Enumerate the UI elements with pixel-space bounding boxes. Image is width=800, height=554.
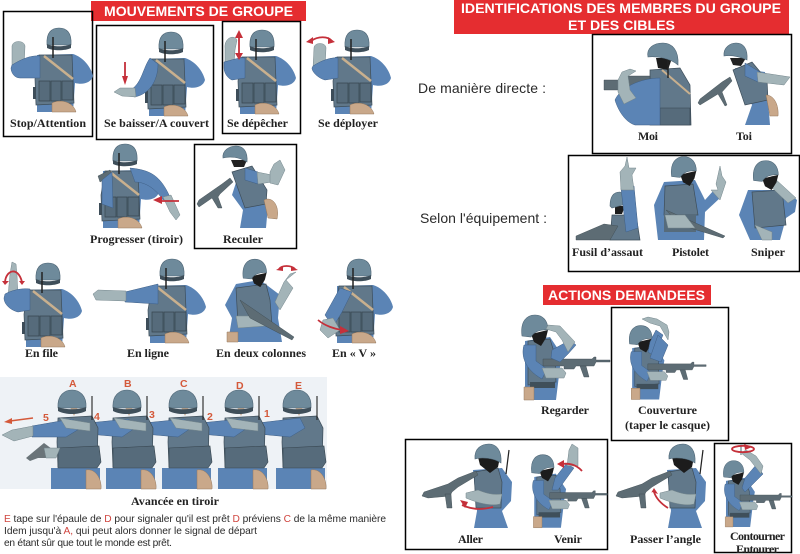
caption: Avancée en tiroir: Avancée en tiroir bbox=[131, 494, 220, 508]
soldier E bbox=[258, 390, 326, 489]
figure: Progresser (tiroir): Progresser (tiroir) bbox=[90, 232, 183, 246]
figure: Pistolet bbox=[654, 157, 726, 259]
figure: Toi bbox=[698, 43, 790, 143]
figure: Pistolet: Pistolet bbox=[672, 245, 709, 259]
letters: E bbox=[295, 380, 302, 392]
figure: Regarder bbox=[522, 315, 610, 417]
figure: Aller bbox=[422, 444, 548, 546]
figure: Se déployer bbox=[306, 30, 391, 130]
figure: Sniper bbox=[739, 161, 797, 259]
panel: Se baisser/A couvert: Se baisser/A couvert bbox=[104, 116, 209, 130]
figure: Passer l'angle bbox=[616, 444, 742, 546]
heading: identifications: ET DES CIBLES bbox=[568, 17, 675, 33]
heading: identifications bbox=[454, 0, 789, 34]
text block: explication: E tape sur l'épaule de D pour signaler qu'il est prêt D préviens C de la même manière bbox=[4, 514, 386, 525]
panel: Se baisser/A couvert bbox=[96, 26, 214, 140]
soldier D bbox=[200, 390, 268, 489]
panel: Reculer bbox=[194, 144, 296, 248]
panel: Aller / Venir bbox=[406, 440, 608, 550]
letters: D bbox=[236, 380, 244, 392]
letters: A bbox=[69, 378, 77, 390]
direction arrow bbox=[4, 418, 33, 424]
panel: Couverture bbox=[612, 308, 728, 440]
panel: avancée en tiroir bbox=[0, 377, 327, 489]
panel: Se dépêcher bbox=[222, 22, 300, 134]
figure: Passer l'angle: Passer l’angle bbox=[630, 532, 702, 546]
panel: Se dépêcher: Se dépêcher bbox=[227, 116, 289, 130]
text: de manière directe: De manière directe : bbox=[418, 80, 546, 96]
figure: En deux colonnes: En deux colonnes bbox=[216, 346, 306, 360]
title: mouvements de groupe: MOUVEMENTS DE GROUPE bbox=[104, 3, 293, 19]
panel: équipement bbox=[568, 156, 800, 272]
text block: explication bbox=[4, 514, 386, 549]
panel: Stop/Attention bbox=[4, 12, 93, 136]
panel: Moi / Toi bbox=[592, 34, 792, 154]
figure: En file: En file bbox=[25, 346, 59, 360]
figure: En ligne bbox=[93, 259, 206, 360]
numbers: 2 bbox=[207, 411, 213, 423]
panel: Stop/Attention: Stop/Attention bbox=[10, 116, 86, 130]
figure: En ligne: En ligne bbox=[127, 346, 170, 360]
figure: En « V » bbox=[318, 259, 393, 360]
panel: Contourner / Entourer bbox=[714, 444, 792, 554]
figure: En file bbox=[2, 262, 82, 360]
panel: Couverture: (taper le casque) bbox=[625, 418, 710, 432]
figure: Regarder: Regarder bbox=[541, 403, 590, 417]
numbers: 4 bbox=[94, 411, 100, 423]
numbers bbox=[43, 408, 270, 424]
text block: explication: en étant sûr que tout le monde est prêt. bbox=[4, 538, 172, 549]
figure: Venir: Venir bbox=[554, 532, 583, 546]
figure: En « V »: En « V » bbox=[332, 346, 376, 360]
letters: C bbox=[180, 378, 188, 390]
soldier A bbox=[2, 390, 101, 489]
text: selon l'équipement: Selon l'équipement : bbox=[420, 210, 547, 226]
heading: actions demandées: ACTIONS DEMANDEES bbox=[548, 287, 705, 303]
figure: Progresser (tiroir) bbox=[90, 144, 183, 246]
panel: Couverture: Couverture bbox=[638, 403, 698, 417]
soldier C bbox=[144, 390, 212, 489]
figure: En deux colonnes bbox=[216, 259, 306, 360]
figure: Sniper: Sniper bbox=[751, 245, 786, 259]
figure: Moi bbox=[604, 43, 691, 143]
soldier B bbox=[88, 390, 156, 489]
heading: identifications: IDENTIFICATIONS DES MEMBRES DU GROUPE bbox=[461, 0, 781, 16]
figure: Toi: Toi bbox=[736, 129, 753, 143]
figure: Moi: Moi bbox=[638, 129, 659, 143]
numbers: 3 bbox=[149, 409, 155, 421]
letters bbox=[69, 378, 302, 392]
figure: Aller: Aller bbox=[458, 532, 484, 546]
figure: Fusil d'assaut: Fusil d’assaut bbox=[572, 245, 643, 259]
figure: Se déployer: Se déployer bbox=[318, 116, 379, 130]
letters: B bbox=[124, 378, 132, 390]
figure: Fusil d'assaut bbox=[572, 157, 643, 259]
figure: Venir bbox=[531, 444, 607, 546]
numbers: 1 bbox=[264, 408, 270, 420]
panel: Contourner / Entourer: Contourner bbox=[730, 529, 786, 543]
numbers: 5 bbox=[43, 412, 49, 424]
panel: Reculer: Reculer bbox=[223, 232, 264, 246]
text block: explication: Idem jusqu'à A, qui peut alors donner le signal de départ bbox=[4, 526, 257, 537]
